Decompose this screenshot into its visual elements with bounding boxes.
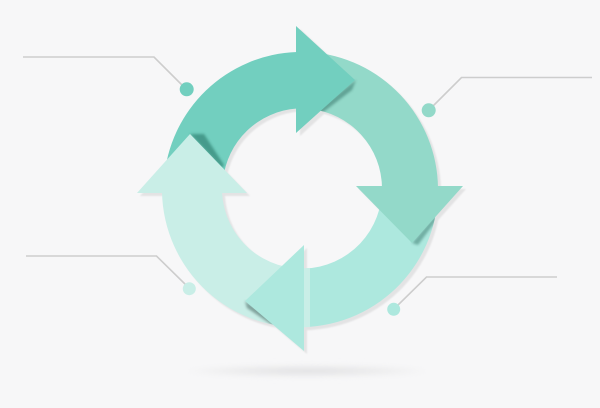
band: bottom segment (304, 186, 438, 327)
arrow head: left (137, 134, 247, 193)
arrow head: bottom (245, 245, 304, 351)
band: right segment (310, 52, 438, 188)
connector: top right (422, 78, 592, 117)
arrow shadow on top segment (190, 134, 224, 168)
soft shadows behind cycle (140, 29, 466, 354)
connector: bottom right (387, 277, 557, 316)
ground shadow (182, 365, 432, 377)
arrow shadow on bottom segment (412, 217, 438, 245)
arrow head: right (356, 186, 463, 243)
arrow shadow on left segment (244, 301, 272, 324)
band: left segment (162, 192, 310, 327)
arrow shadow on right segment (318, 80, 356, 113)
band: top segment (164, 52, 297, 180)
arrow head: top (296, 26, 355, 133)
connector: bottom left (26, 256, 196, 295)
connector: top left (23, 57, 194, 96)
